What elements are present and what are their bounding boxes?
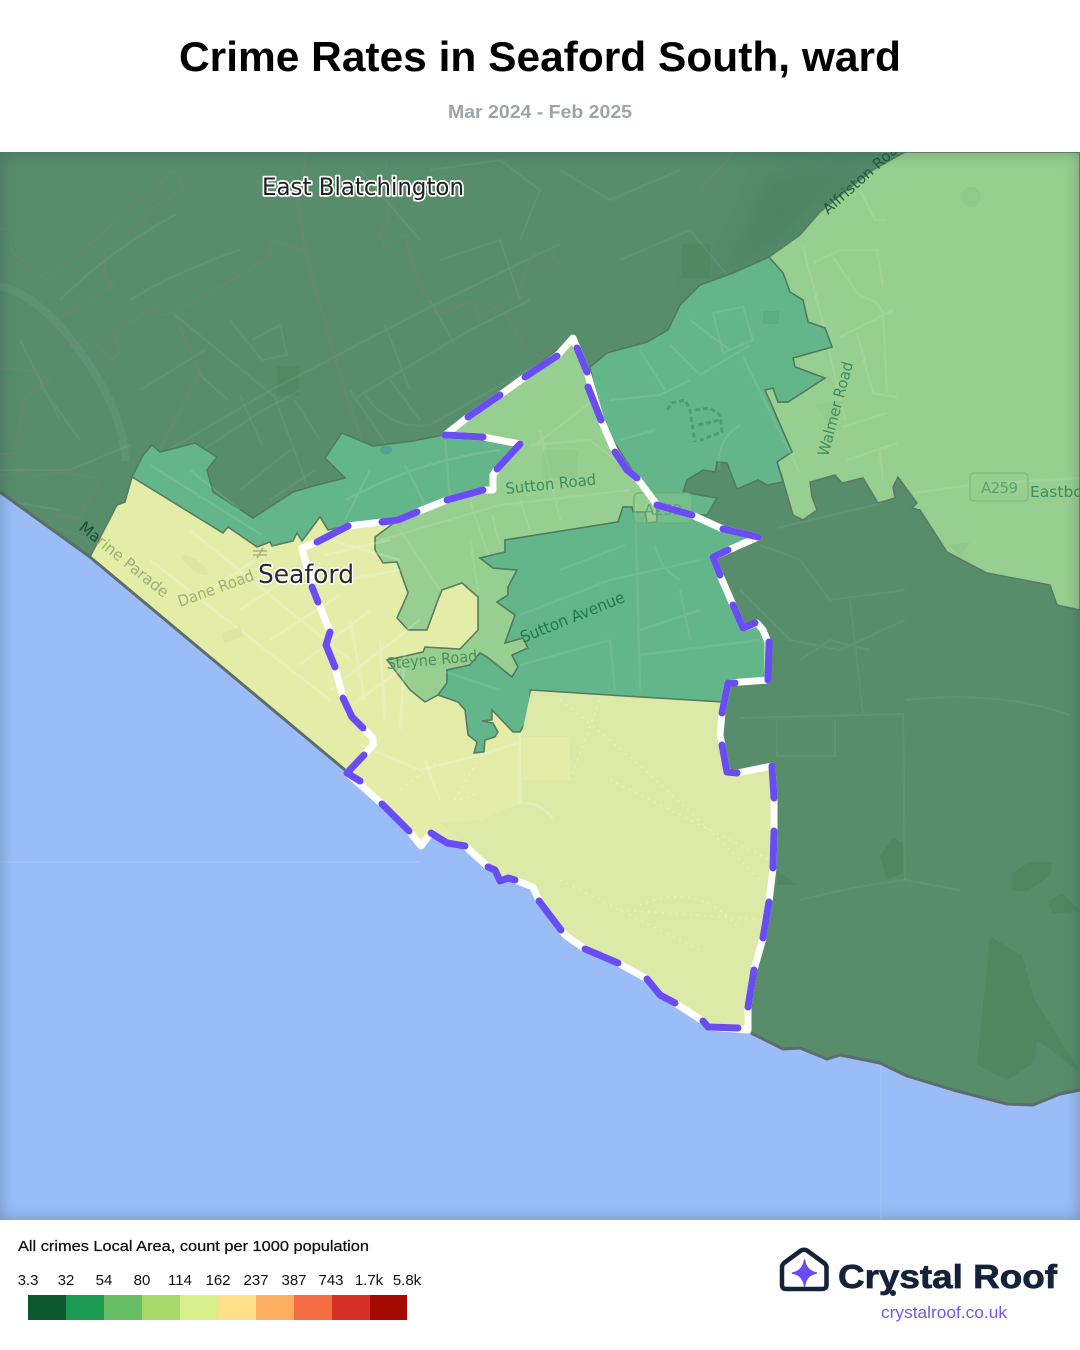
website url: crystalroof.co.uk [881, 1304, 1008, 1322]
ward boundary: white dashed outline with purple dashes [302, 338, 774, 1030]
legend scale labels: 1.7k [355, 1272, 384, 1289]
footer [18, 1238, 1058, 1322]
base area: lowest crime dark green [0, 152, 1080, 1220]
legend scale labels: 162 [205, 1272, 231, 1289]
area: mid green west strip [132, 433, 520, 547]
road label: Sutton Road: Sutton Road [505, 471, 597, 498]
logo: Crystal Roof [782, 1250, 1058, 1322]
dark area ward boundary lines [0, 153, 733, 551]
road shield: A259 east: A259 [981, 479, 1018, 497]
legend scale labels: 743 [318, 1272, 344, 1289]
road shield: A259 east [970, 473, 1028, 501]
place label: East Blatchington: East Blatchington [262, 173, 464, 201]
legend colour bar [28, 1295, 407, 1320]
icon: pond [380, 446, 392, 454]
date range subtitle: Mar 2024 - Feb 2025 [448, 102, 632, 122]
road shield: A259 west: A259 [644, 501, 682, 519]
road shield: A259 west [634, 493, 692, 523]
darker strip near Alfriston Road [700, 152, 905, 285]
wordmark: Crystal Roof [838, 1258, 1058, 1295]
header [179, 33, 901, 122]
place label: Seaford: Seaford [258, 560, 354, 590]
area: mid green Sutton Avenue [438, 500, 768, 753]
legend scale labels: 54 [96, 1272, 112, 1289]
icon: railway station [253, 548, 267, 558]
road label: Marine Parade: Marine Parade [75, 518, 172, 601]
title: Crime Rates in Seaford South, ward [179, 33, 901, 80]
road label: Walmer Road: Walmer Road [814, 360, 857, 458]
legend scale labels: 5.8k [393, 1272, 422, 1289]
legend scale labels [18, 1272, 422, 1289]
area: mid green north east [590, 257, 832, 515]
road label: Sutton Avenue: Sutton Avenue [517, 588, 627, 647]
area: light green ward north [375, 338, 657, 702]
legend scale labels: 237 [243, 1272, 269, 1289]
dark area woodland patches [277, 244, 1080, 1080]
area: yellow ward west and south [90, 477, 773, 1030]
legend scale labels: 387 [281, 1272, 307, 1289]
dark area streets [0, 160, 1070, 900]
south east downland [440, 691, 773, 1030]
road label: Dane Road: Dane Road [175, 566, 257, 611]
legend scale labels: 80 [134, 1272, 150, 1289]
legend scale labels: 3.3 [18, 1272, 38, 1289]
legend scale labels: 32 [58, 1272, 74, 1289]
sea [0, 492, 1080, 1220]
legend title: All crimes Local Area, count per 1000 population [18, 1238, 369, 1255]
legend scale labels: 114 [168, 1272, 192, 1289]
area: light green east [765, 152, 1080, 610]
road label: Steyne Road: Steyne Road [386, 647, 478, 673]
choropleth map [0, 152, 1080, 1220]
icon: house with star [782, 1250, 826, 1289]
legend [18, 1238, 422, 1320]
